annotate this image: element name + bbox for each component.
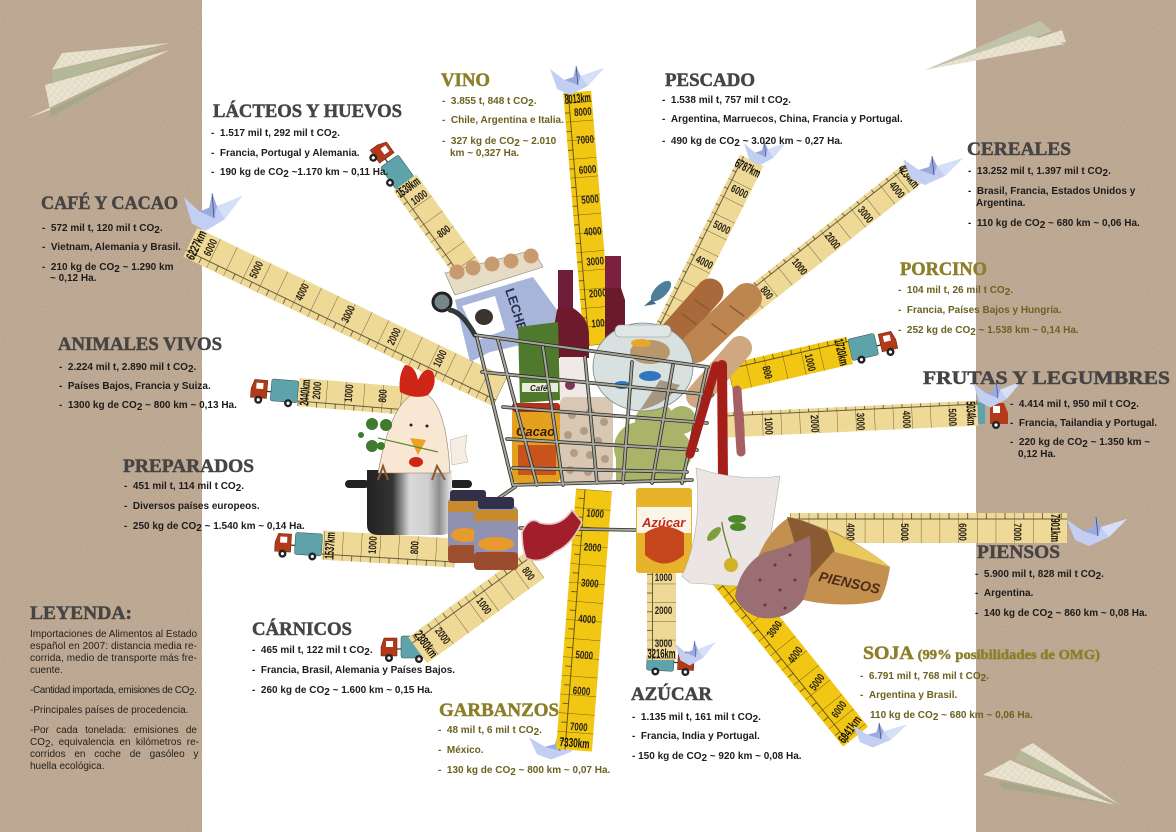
- text: legend body: corridos en coche de gasóleo y: [30, 749, 198, 760]
- heading: pescado: PESCADO: [665, 70, 755, 91]
- text: legend body: corrida, medio de transporte más fre-: [30, 653, 197, 664]
- text: legend body: -Cantidad importada, emisiones de CO: [30, 685, 189, 696]
- text: animales vivos: [59, 362, 237, 413]
- icon: cacao jar: Cacao: [516, 424, 555, 439]
- truck: cárnicos: [381, 636, 428, 663]
- tape: porcino: 1720km: [831, 337, 852, 367]
- text: café y cacao: 2: [114, 264, 120, 275]
- text: piensos: 2: [1047, 610, 1053, 621]
- text: lácteos y huevos: 2: [283, 169, 289, 180]
- text: vino: - 3.855 t, 848 t CO: [442, 96, 528, 107]
- text: soja: ~ 680 km ~ 0,06 Ha.: [938, 710, 1033, 721]
- text: preparados: 2: [236, 483, 242, 494]
- text: legend body: -Principales países de procedencia.: [30, 705, 188, 716]
- tape: frutas y legumbres: 5000: [945, 408, 958, 426]
- text: frutas y legumbres: 2: [1131, 401, 1137, 412]
- text: vino: km ~ 0,327 Ha.: [450, 148, 519, 159]
- text: lácteos y huevos: - 190 kg de CO: [211, 167, 283, 178]
- tape: café y cacao: 3000: [339, 304, 358, 325]
- heading: piensos: PIENSOS: [977, 542, 1060, 563]
- text: vino: 2: [528, 98, 534, 109]
- tape: vino: 3000: [586, 255, 604, 269]
- text: pescado: 2: [734, 138, 740, 149]
- tape: cereales: 2000: [822, 230, 842, 252]
- tape: garbanzos: 5000: [575, 649, 594, 663]
- text: animales vivos: - Países Bajos, Francia y Suiza.: [59, 381, 211, 392]
- text: frutas y legumbres: [1010, 399, 1157, 460]
- text: soja: .: [986, 671, 989, 682]
- tape: pescado: 4000: [693, 253, 715, 273]
- text: frutas y legumbres: - 220 kg de CO: [1010, 437, 1082, 448]
- text: pescado: [662, 95, 903, 149]
- text: animales vivos: - 2.224 mil t, 2.890 mil t CO: [59, 362, 188, 373]
- tape: preparados: 800: [409, 541, 422, 555]
- text: porcino: ~ 1.538 km ~ 0,14 Ha.: [976, 325, 1079, 336]
- tape: lácteos: 1539km: [393, 173, 423, 201]
- icon: feed sack with spilled grain: [735, 517, 890, 618]
- text: soja: 2: [981, 673, 987, 684]
- text: pescado: - 1.538 mil t, 757 mil t CO: [662, 95, 783, 106]
- text: garbanzos: [438, 725, 611, 778]
- tape: cárnicos: 1000: [473, 595, 494, 617]
- icon: cacao jar: [512, 403, 560, 483]
- text: garbanzos: ~ 800 km ~ 0,07 Ha.: [516, 765, 611, 776]
- icon: bread loaves: [672, 292, 747, 396]
- heading: lácteos y huevos: LÁCTEOS Y HUEVOS: [213, 100, 402, 122]
- tape: cereales: 4234km: [895, 162, 923, 191]
- text: piensos: [975, 569, 1148, 621]
- text: cereales: [968, 166, 1140, 231]
- icon: fish: [644, 278, 674, 306]
- tape: cereales: 3000: [855, 204, 875, 226]
- text: lácteos y huevos: - 1.517 mil t, 292 mil t CO: [211, 128, 332, 139]
- icon: paper plane top right: [925, 21, 1066, 70]
- icon: grape label box: [560, 357, 586, 399]
- tape: cárnicos: 2380km: [411, 628, 441, 661]
- text: porcino: - Francia, Países Bajos y Hungría.: [898, 305, 1062, 316]
- icon: milk carton: [455, 277, 557, 362]
- tape: soja: 5000: [807, 672, 828, 693]
- text: café y cacao: - Vietnam, Alemania y Brasil.: [42, 242, 181, 253]
- text: cárnicos: ~ 1.600 km ~ 0,15 Ha.: [330, 685, 433, 696]
- boat: cereales: [903, 156, 963, 185]
- text: vino: 2: [514, 138, 520, 149]
- text: cárnicos: - 465 mil t, 122 mil t CO: [252, 645, 364, 656]
- text: café y cacao: .: [160, 223, 163, 234]
- tape: azúcar: 2000: [655, 605, 672, 617]
- tape: piensos: 4000: [844, 523, 856, 541]
- text: vino: - Chile, Argentina e Italia.: [442, 115, 564, 126]
- text: animales vivos: .: [194, 362, 197, 373]
- text: preparados: 2: [196, 523, 202, 534]
- text: café y cacao: - 572 mil t, 120 mil t CO: [42, 223, 154, 234]
- tape: piensos: [790, 513, 1067, 543]
- icon: coffee package: Café: [530, 384, 548, 393]
- tape: frutas y legumbres: 1000: [761, 417, 775, 435]
- text: lácteos y huevos: - Francia, Portugal y Alemania.: [211, 148, 360, 159]
- text: legend body: CO: [30, 737, 45, 748]
- icon: pot: [345, 470, 472, 535]
- tape: vino: 2000: [589, 287, 607, 301]
- tape: lácteos: 1000: [409, 188, 430, 208]
- text: café y cacao: [42, 223, 181, 284]
- text: cereales: .: [1108, 166, 1111, 177]
- tape: animales vivos: [296, 378, 421, 416]
- text: cereales: - Brasil, Francia, Estados Unidos y: [968, 186, 1136, 197]
- text: lácteos y huevos: .: [337, 128, 340, 139]
- text: café y cacao: - 210 kg de CO: [42, 262, 114, 273]
- text: pescado: 2: [783, 97, 789, 108]
- text: pescado: - 490 kg de CO: [662, 136, 734, 147]
- text: legend body: cuente.: [30, 665, 63, 676]
- text: pescado: - Argentina, Marruecos, China, Francia y Portugal.: [662, 114, 903, 125]
- text: garbanzos: 2: [534, 727, 540, 738]
- heading: garbanzos: GARBANZOS: [439, 700, 559, 721]
- text: frutas y legumbres: 2: [1082, 439, 1088, 450]
- text: café y cacao: 2: [154, 225, 160, 236]
- tape: pescado: [653, 154, 764, 341]
- text: azúcar: ~ 920 km ~ 0,08 Ha.: [707, 751, 802, 762]
- text: legend body: 2: [189, 687, 195, 698]
- tape: piensos: 6000: [956, 523, 968, 541]
- text: animales vivos: 2: [188, 364, 194, 375]
- text: legend body: .: [194, 685, 197, 696]
- icon: wine bottle back: [605, 256, 625, 340]
- icon: pears: [614, 402, 696, 483]
- tape: cereales: [732, 162, 923, 320]
- tape: porcino: 1000: [801, 353, 818, 373]
- text: cárnicos: 2: [364, 647, 370, 658]
- boat: frutas: [973, 380, 1021, 408]
- tape: vino: 4000: [583, 225, 602, 239]
- text: cárnicos: [252, 645, 455, 698]
- tape: vino: 7000: [576, 133, 594, 148]
- tape: cereales: 1000: [789, 256, 809, 278]
- tape: café y cacao: 4000: [293, 282, 312, 303]
- text: cereales: - 13.252 mil t, 1.397 mil t CO: [968, 166, 1103, 177]
- text: preparados: .: [241, 481, 244, 492]
- text: legend body: español en 2007: distancia media re-: [30, 641, 197, 652]
- tape: garbanzos: 3000: [581, 577, 599, 591]
- text: garbanzos: - 130 kg de CO: [438, 765, 510, 776]
- tape: garbanzos: [556, 489, 612, 752]
- heading: porcino: PORCINO: [900, 259, 987, 280]
- text: preparados: ~ 1.540 km ~ 0,14 Ha.: [202, 521, 305, 532]
- text: cereales: - 110 kg de CO: [968, 218, 1040, 229]
- text: piensos: - 140 kg de CO: [975, 608, 1047, 619]
- text: cereales: ~ 680 km ~ 0,06 Ha.: [1045, 218, 1140, 229]
- cart: wire basket: [433, 293, 712, 530]
- text: preparados: - Diversos países europeos.: [124, 501, 260, 512]
- text: preparados: - 451 mil t, 114 mil t CO: [124, 481, 236, 492]
- text: piensos: .: [1101, 569, 1104, 580]
- heading: frutas y legumbres: FRUTAS Y LEGUMBRES: [923, 368, 1170, 389]
- text: porcino: - 252 kg de CO: [898, 325, 970, 336]
- tape: frutas y legumbres: [724, 401, 979, 437]
- icon: wine bottle front: [553, 270, 589, 358]
- tape: café y cacao: 2000: [385, 326, 404, 347]
- panel: left kraft band: [0, 0, 202, 832]
- text: legend body: [30, 629, 199, 772]
- tape: azúcar: 3000: [655, 638, 672, 650]
- text: pescado: .: [788, 95, 791, 106]
- icon: chicken with parsley: [358, 365, 468, 480]
- heading: cárnicos: CÁRNICOS: [252, 618, 352, 640]
- tape: vino: [563, 90, 612, 346]
- text: azúcar: .: [758, 712, 761, 723]
- icon: milk carton: LECHE: [502, 286, 530, 333]
- text: lácteos y huevos: 2: [332, 130, 338, 141]
- text: azúcar: [632, 712, 802, 764]
- tape: lácteos: [392, 173, 486, 288]
- truck: porcino: [848, 329, 899, 366]
- text: frutas y legumbres: - 4.414 mil t, 950 mil t CO: [1010, 399, 1131, 410]
- text: porcino: [898, 285, 1079, 338]
- text: azúcar: - 150 kg de CO: [632, 751, 701, 762]
- text: pescado: ~ 3.020 km ~ 0,27 Ha.: [740, 136, 843, 147]
- boat: soja: [853, 723, 907, 748]
- tape: piensos: 7901km: [1048, 514, 1063, 542]
- tape: café y cacao: 1000: [431, 348, 450, 370]
- text: frutas y legumbres: .: [1136, 399, 1139, 410]
- tape: café y cacao: 6227km: [183, 228, 210, 262]
- text: preparados: - 250 kg de CO: [124, 521, 196, 532]
- text: legend body: -Por cada tonelada: emisiones de: [30, 725, 197, 736]
- tape: cereales: 4000: [886, 180, 907, 201]
- heading: cereales: CEREALES: [967, 139, 1071, 160]
- text: garbanzos: 2: [510, 767, 516, 778]
- tape: café y cacao: [182, 227, 507, 406]
- tape: vino: 1000: [591, 317, 610, 331]
- tape: garbanzos: 1000: [586, 507, 604, 521]
- text: legend body: , equivalencia en kilómetros re-: [51, 737, 199, 748]
- truck: lácteos: [365, 138, 414, 192]
- heading: animales vivos: ANIMALES VIVOS: [58, 334, 222, 355]
- truck: azúcar: [646, 648, 695, 677]
- text: piensos: - 5.900 mil t, 828 mil t CO: [975, 569, 1096, 580]
- text: soja: 110 kg de CO: [870, 710, 933, 721]
- panel: right kraft band: [976, 0, 1176, 832]
- tape: cárnicos: [408, 552, 544, 663]
- heading: soja: SOJA (99% posibilidades de OMG): [863, 643, 1100, 664]
- heading: azúcar: AZÚCAR: [631, 683, 712, 705]
- tape: frutas y legumbres: 2000: [807, 415, 821, 433]
- tape: pescado: 5000: [711, 219, 732, 238]
- tape: azúcar: [647, 565, 676, 661]
- icon: sugar packet: Azúcar: [641, 515, 686, 530]
- text: cereales: Argentina.: [976, 198, 1026, 209]
- text: soja: [860, 671, 1033, 723]
- icon: paper plane top left: [28, 43, 170, 118]
- text: garbanzos: - México.: [438, 745, 484, 756]
- text: cárnicos: - 260 kg de CO: [252, 685, 324, 696]
- tape: vino: 6000: [578, 163, 597, 177]
- tape: garbanzos: 6000: [572, 685, 591, 699]
- tape: frutas y legumbres: 5034km: [963, 401, 979, 426]
- text: animales vivos: 2: [137, 402, 143, 413]
- truck: animales vivos: [250, 377, 299, 408]
- tape: animales vivos: 2000: [311, 381, 325, 400]
- icon: fishbowl: [593, 323, 693, 411]
- tape: preparados: 1000: [367, 536, 380, 554]
- text: lácteos y huevos: [211, 128, 389, 180]
- icon: chorizo sausages: [690, 365, 741, 478]
- text: piensos: - Argentina.: [975, 588, 1034, 599]
- tape: preparados: 1537km: [321, 532, 338, 559]
- tape: animales vivos: 800: [377, 389, 390, 403]
- text: café y cacao: ~ 1.290 km: [120, 262, 174, 273]
- text: vino: [442, 96, 564, 159]
- boat: garbanzos: [529, 735, 589, 760]
- tape: cereales: 800: [757, 284, 775, 302]
- heading: preparados: PREPARADOS: [123, 456, 254, 477]
- text: porcino: - 104 mil t, 26 mil t CO: [898, 285, 1005, 296]
- text: vino: - 327 kg de CO: [442, 136, 514, 147]
- text: porcino: .: [1010, 285, 1013, 296]
- icon: chickpeas jar: [560, 397, 613, 482]
- heading: leyenda: LEYENDA:: [30, 603, 132, 624]
- text: vino: .: [534, 96, 537, 107]
- text: lácteos y huevos: ~1.170 km ~ 0,11 Ha.: [289, 167, 389, 178]
- tape: azúcar: 1000: [655, 572, 672, 584]
- tape: azúcar: 3216km: [648, 646, 676, 661]
- text: preparados: [124, 481, 305, 534]
- text: azúcar: 2: [753, 714, 759, 725]
- boat: pescado: [744, 141, 786, 166]
- tape: vino: 8013km: [564, 90, 591, 107]
- truck: frutas y legumbres: [976, 402, 1008, 429]
- text: cereales: 2: [1040, 220, 1046, 231]
- tape: garbanzos: 7330km: [559, 734, 590, 751]
- text: legend body: Importaciones de Alimentos al Estado: [30, 629, 197, 640]
- text: cereales: 2: [1103, 168, 1109, 179]
- text: piensos: 2: [1096, 571, 1102, 582]
- truck: preparados: [274, 531, 323, 561]
- boat: piensos: [1067, 517, 1127, 546]
- tape: porcino: [727, 337, 853, 392]
- tape: frutas y legumbres: 4000: [899, 410, 913, 429]
- text: cárnicos: .: [370, 645, 373, 656]
- text: piensos: ~ 860 km ~ 0,08 Ha.: [1053, 608, 1148, 619]
- tape: garbanzos: 2000: [583, 541, 602, 555]
- heading: café y cacao: CAFÉ Y CACAO: [41, 192, 178, 214]
- icon: feed sack with spilled grain: PIENSOS: [817, 568, 882, 597]
- text: animales vivos: - 1300 kg de CO: [59, 400, 137, 411]
- text: legend body: huella ecológica.: [30, 761, 104, 772]
- tape: preparados: [321, 531, 456, 567]
- icon: egg carton: [445, 248, 543, 295]
- text: azúcar: - 1.135 mil t, 161 mil t CO: [632, 712, 753, 723]
- icon: coffee package: [518, 322, 560, 403]
- tape: garbanzos: 4000: [578, 613, 596, 627]
- tape: piensos: 7000: [1011, 523, 1023, 541]
- tape: pescado: 6000: [729, 183, 750, 202]
- tape: animales vivos: 1000: [343, 384, 357, 402]
- heading: vino: VINO: [441, 70, 490, 91]
- tape: garbanzos: 7000: [569, 721, 588, 735]
- text: vino: ~ 2.010: [520, 136, 557, 147]
- tape: soja: [711, 563, 869, 748]
- tape: vino: 8000: [574, 106, 592, 120]
- text: soja: - Argentina y Brasil.: [860, 690, 957, 701]
- tape: soja: 6941km: [835, 713, 864, 746]
- icon: soy sack: [682, 468, 780, 587]
- tape: café y cacao: 5000: [247, 259, 266, 281]
- text: porcino: 2: [970, 327, 976, 338]
- tape: soja: 6000: [829, 699, 850, 721]
- tape: vino: 5000: [581, 193, 599, 207]
- text: café y cacao: ~ 0,12 Ha.: [50, 273, 97, 284]
- icon: meat chop: [522, 510, 582, 560]
- text: porcino: 2: [1005, 287, 1011, 298]
- tape: soja: 3000: [765, 619, 785, 640]
- boat: vino: [550, 66, 604, 95]
- text: garbanzos: - 48 mil t, 6 mil t CO: [438, 725, 534, 736]
- tape: cárnicos: 800: [519, 565, 537, 583]
- text: frutas y legumbres: 0,12 Ha.: [1018, 449, 1056, 460]
- text: azúcar: - Francia, India y Portugal.: [632, 731, 760, 742]
- text: animales vivos: ~ 800 km ~ 0,13 Ha.: [142, 400, 237, 411]
- text: azúcar: 2: [701, 753, 707, 764]
- icon: sugar packet: [636, 488, 692, 573]
- icon: baby food jars: [448, 490, 518, 570]
- text: garbanzos: .: [539, 725, 542, 736]
- text: cárnicos: - Francia, Brasil, Alemania y Países Bajos.: [252, 665, 455, 676]
- tape: pescado: 6787km: [732, 155, 763, 181]
- text: soja: - 6.791 mil t, 768 mil t CO: [860, 671, 981, 682]
- tape: café y cacao: 6000: [202, 237, 221, 259]
- text: legend body: 2: [45, 739, 51, 750]
- text: frutas y legumbres: ~ 1.350 km ~: [1088, 437, 1150, 448]
- boat: café: [184, 193, 242, 231]
- tape: cárnicos: 2000: [432, 625, 452, 647]
- tape: soja: 4000: [785, 644, 806, 666]
- tape: porcino: 800: [759, 365, 774, 380]
- text: soja: 2: [933, 712, 939, 723]
- tape: frutas y legumbres: 3000: [853, 413, 867, 431]
- text: frutas y legumbres: - Francia, Tailandia y Portugal.: [1010, 418, 1157, 429]
- tape: piensos: 5000: [898, 523, 910, 541]
- boat: azúcar: [675, 641, 715, 666]
- tape: lácteos: 800: [435, 223, 453, 241]
- text: cárnicos: 2: [324, 687, 330, 698]
- icon: paper plane bottom right: [983, 743, 1120, 805]
- tape: animales vivos: 2440km: [296, 379, 313, 406]
